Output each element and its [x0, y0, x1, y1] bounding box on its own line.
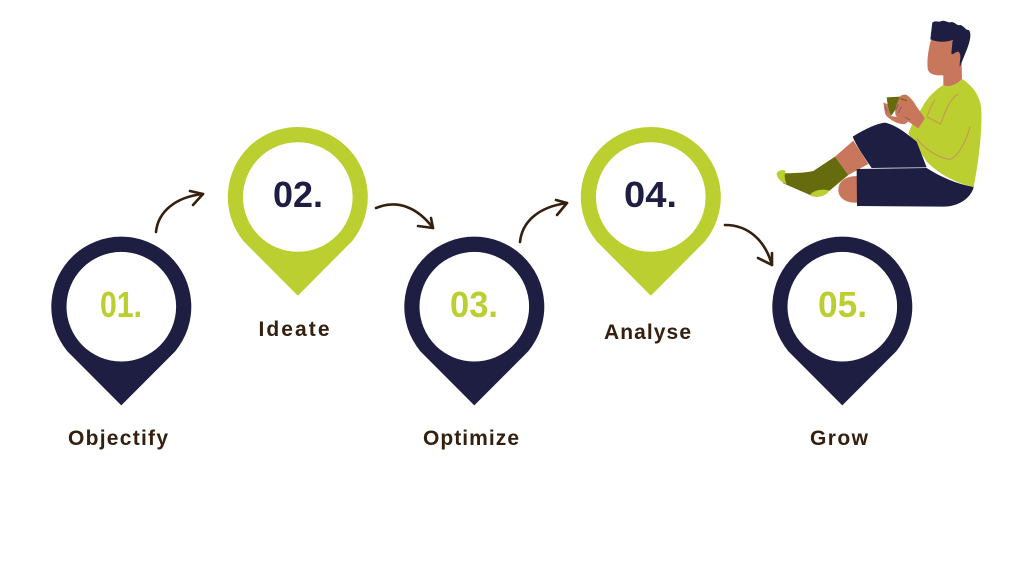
step 3 pin [404, 237, 544, 405]
rear foot skin [838, 176, 857, 203]
number 04: 04. [624, 174, 677, 215]
shirt detail on hand [901, 99, 907, 101]
number 03: 03. [450, 284, 498, 325]
sweater fold lines [917, 94, 970, 159]
shorts lower [857, 168, 974, 207]
number 02: 02. [273, 174, 323, 215]
step 1 label: Objectify [68, 427, 168, 450]
sock heel [810, 190, 829, 197]
step 2 label: Ideate [258, 318, 330, 341]
arrow 3 to 4 [520, 200, 567, 242]
arrow 2 to 3 [376, 205, 433, 228]
number 01: 01. [100, 284, 142, 325]
knee shin skin [835, 141, 868, 175]
sweater [908, 79, 981, 187]
arrow 1 to 2 [156, 191, 203, 232]
sock [777, 157, 848, 197]
sock toe [777, 170, 787, 184]
step 4 label: Analyse [604, 321, 691, 344]
neck and face [927, 40, 962, 86]
illustration: seated person with cup [777, 21, 981, 207]
finger lines [885, 104, 910, 120]
shorts upper leg [853, 123, 927, 168]
step 2 pin [228, 127, 368, 296]
number 05: 05. [818, 284, 867, 325]
mug [887, 97, 900, 116]
step 5 label: Grow [810, 427, 869, 450]
arrow 4 to 5 [725, 225, 772, 265]
step 4 pin [581, 127, 721, 296]
step 1 pin [51, 237, 191, 405]
hand under mug [883, 103, 908, 124]
step 5 pin [772, 237, 912, 405]
step 3 label: Optimize [423, 427, 519, 450]
hand over mug [895, 95, 925, 128]
hair [930, 21, 970, 67]
